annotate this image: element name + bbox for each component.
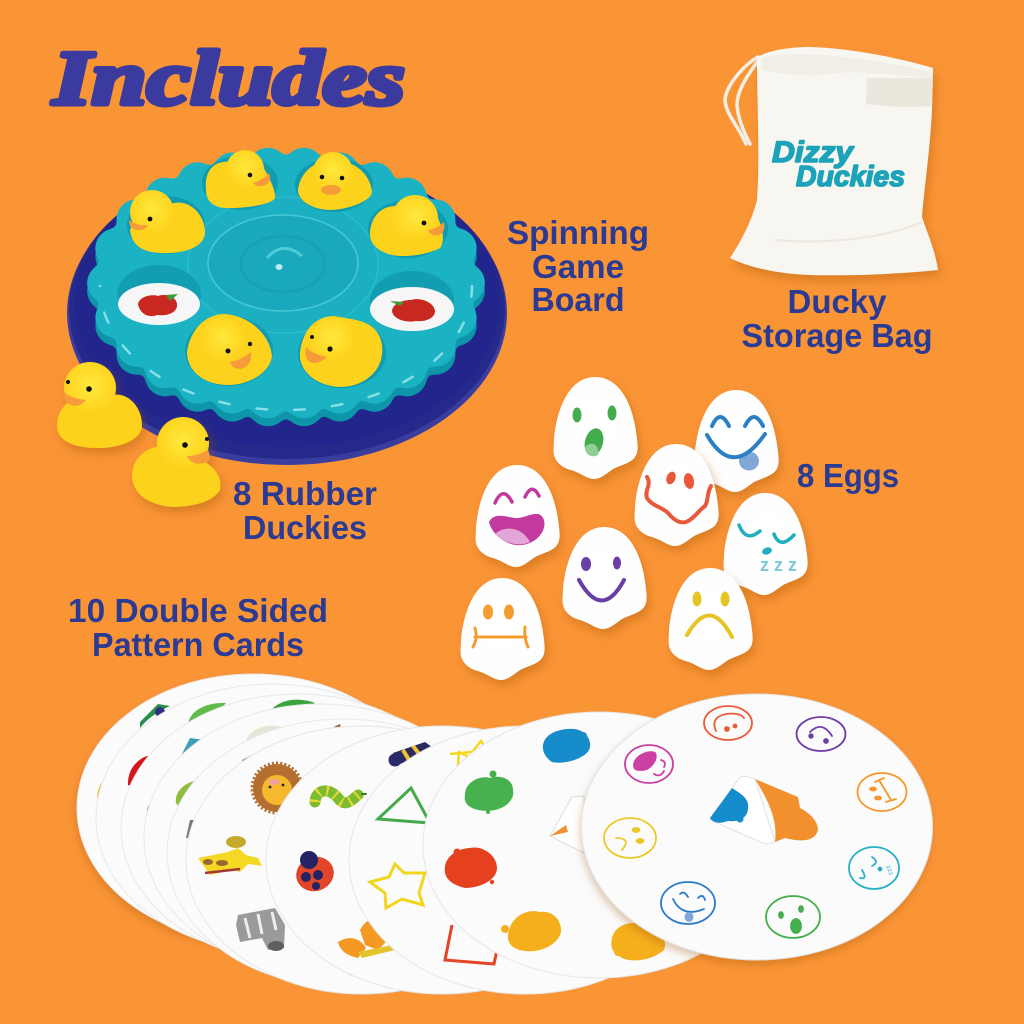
- card 6: [186, 726, 538, 994]
- duck bottom right: [300, 316, 382, 387]
- title: Includes: Includes: [52, 35, 405, 121]
- ring faces: [604, 706, 906, 938]
- card 7: [266, 726, 618, 994]
- ring: yellow: [604, 818, 656, 858]
- label: spinning game board: Game: [532, 248, 624, 285]
- label: 10 double sided pattern cards: [68, 592, 328, 663]
- label: 10 double sided pattern cards: Pattern Cards: [92, 626, 304, 663]
- card 10: [582, 694, 932, 960]
- icon: caterpillar: [315, 791, 366, 803]
- label: ducky storage bag: Storage Bag: [742, 317, 932, 354]
- icon: bee: [388, 742, 432, 766]
- card 5: [167, 719, 519, 987]
- card 1: [77, 674, 429, 942]
- ring: purple: [796, 717, 846, 751]
- egg: sleeping teal: [724, 493, 808, 595]
- ring: red: [704, 706, 752, 740]
- duck top right: [298, 152, 372, 210]
- icon: giraffe: [198, 836, 262, 875]
- board: central spinner dial: [188, 197, 378, 333]
- icon: red blob: [445, 847, 497, 888]
- card 8: [349, 726, 701, 994]
- board: scalloped teal side: [107, 175, 465, 407]
- egg: smiling purple: [563, 527, 647, 629]
- card 2: [96, 684, 448, 952]
- label: ducky storage bag: Ducky: [788, 283, 887, 320]
- icon: yellow blob right: [611, 923, 665, 960]
- board base: navy disc: [67, 159, 507, 465]
- icon: outline star top: [450, 741, 485, 766]
- loose duck 2: [132, 417, 220, 507]
- label: spinning game board: [507, 214, 649, 318]
- card 9: [423, 712, 775, 978]
- duck top left: [206, 150, 275, 208]
- label: spinning game board: Spinning: [507, 214, 649, 251]
- egg: sad yellow: [669, 568, 753, 670]
- card 3: [121, 694, 473, 962]
- icon: lion mane bottom: [333, 962, 368, 978]
- egg: wavy mouth red: [635, 444, 719, 546]
- icon: green blob: [465, 770, 513, 814]
- label: 8 rubber duckies: Duckies: [243, 509, 367, 546]
- ring: teal: zzz: [884, 864, 894, 877]
- duck holes: [127, 156, 448, 388]
- icon: outline star: [370, 864, 425, 908]
- board: scalloped teal top: [100, 162, 472, 410]
- bag fold shading: [762, 54, 932, 78]
- duck left: [129, 190, 205, 253]
- bag logo: Duckies: [796, 161, 905, 193]
- center window with flap: [710, 776, 818, 844]
- card 4: [144, 704, 496, 972]
- duck bottom left: [187, 314, 272, 385]
- icon: outline square: [445, 925, 497, 964]
- bag body: [730, 47, 938, 275]
- label: spinning game board: Board: [532, 281, 624, 318]
- ring: blue: [661, 882, 715, 924]
- label: ducky storage bag: [742, 283, 932, 354]
- duck right: [370, 195, 444, 256]
- icon: yellow blob: [501, 911, 561, 951]
- icon: lion: [253, 764, 301, 812]
- spinning game board: [57, 150, 507, 507]
- ring: green: [766, 896, 820, 938]
- apple slot left: [117, 265, 201, 325]
- ring: magenta: [625, 745, 673, 783]
- icon: outline triangle: [378, 788, 430, 823]
- apple slot right: [370, 271, 454, 331]
- pattern cards stack: [77, 674, 932, 994]
- label: 10 double sided pattern cards: 10 Double Sided: [68, 592, 328, 629]
- egg: sleeping teal: zzz: [760, 555, 797, 575]
- bag cord: [725, 57, 758, 144]
- icon: butterfly: [338, 921, 395, 958]
- eggs group: [461, 377, 808, 680]
- icon: ladybug: [291, 851, 339, 896]
- icon: blue blob: [543, 729, 590, 763]
- icon: zebra: [236, 908, 285, 951]
- egg: laughing magenta: [476, 465, 560, 567]
- label: 8 rubber duckies: [233, 475, 377, 546]
- ring: teal: [849, 847, 899, 889]
- bag logo: Dizzy: [772, 136, 854, 169]
- label: 8 rubber duckies: 8 Rubber: [233, 475, 377, 512]
- egg: gritted orange: [461, 578, 545, 680]
- egg: surprised green: [554, 377, 638, 479]
- storage bag: [725, 47, 938, 275]
- egg: tongue out blue: [695, 390, 779, 492]
- label: 8 eggs: 8 Eggs: [797, 457, 899, 494]
- center window: [550, 796, 584, 853]
- bag logo: [772, 136, 905, 193]
- loose duck 1: [57, 362, 142, 448]
- ring: orange: [858, 773, 906, 811]
